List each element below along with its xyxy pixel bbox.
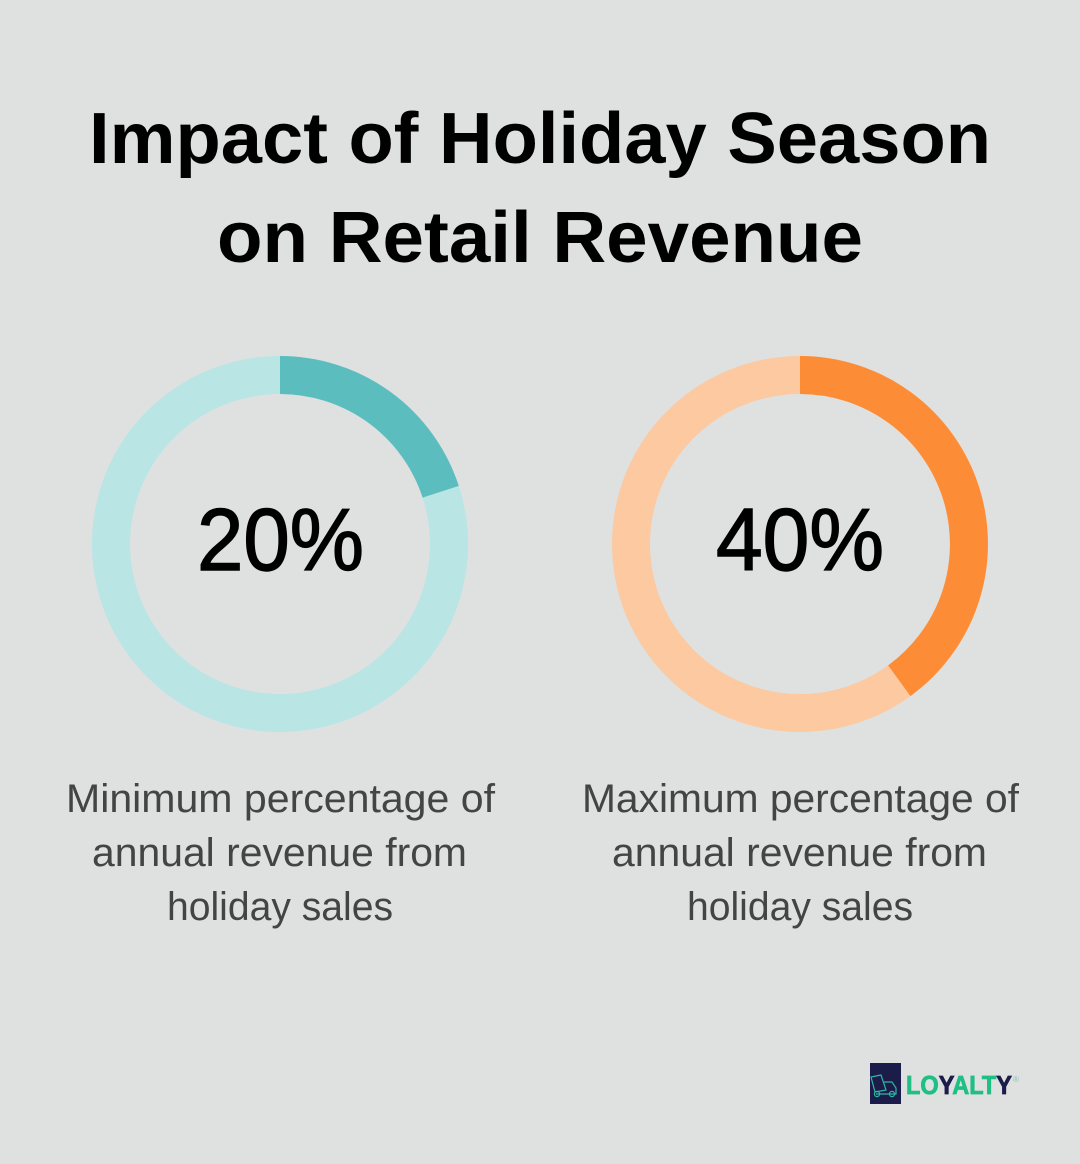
logo: Loyalty <box>870 1063 1019 1104</box>
donut chart: 40% <box>631 375 969 713</box>
caption: minimum percentage: annual revenue from <box>92 831 467 875</box>
title <box>89 99 991 278</box>
caption: minimum percentage: holiday sales <box>167 885 393 929</box>
caption: maximum percentage <box>582 777 1020 929</box>
title: on Retail Revenue <box>217 198 863 278</box>
registered mark: ® <box>1013 1075 1019 1084</box>
donut chart: 20%: 20% <box>197 490 364 589</box>
title: Impact of Holiday Season <box>89 99 991 179</box>
wordmark: LOYALTY <box>906 1070 1012 1100</box>
donut chart: 20% <box>111 375 449 713</box>
caption: minimum percentage <box>66 777 496 929</box>
caption: maximum percentage: holiday sales <box>687 885 913 929</box>
caption: maximum percentage: annual revenue from <box>612 831 987 875</box>
caption: maximum percentage: Maximum percentage of <box>582 777 1020 821</box>
caption: minimum percentage: Minimum percentage of <box>66 777 496 821</box>
icon: truck on navy square <box>870 1063 901 1104</box>
donut chart: 40%: 40% <box>716 490 884 589</box>
